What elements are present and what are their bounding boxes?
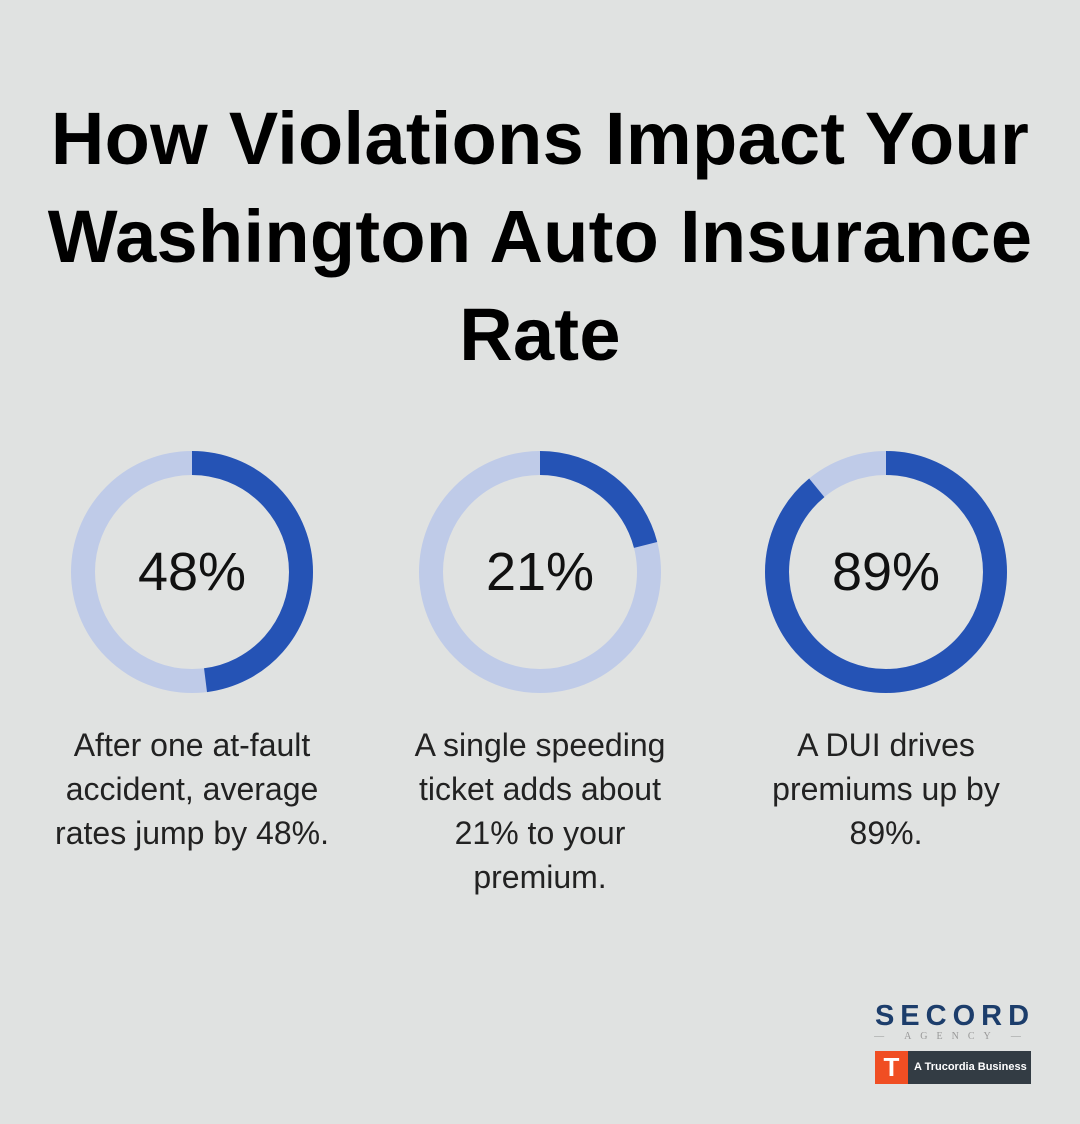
text: accident: After one at-fault accident, average rates jump by 48%. bbox=[55, 727, 329, 851]
donut: 48%: 48% bbox=[138, 542, 246, 602]
logo text: SECORD: SECORD bbox=[875, 1000, 1035, 1032]
donut: 21%: 21% bbox=[486, 542, 594, 602]
text: speeding: A single speeding ticket adds about 21% to your premium. bbox=[415, 727, 665, 895]
donut: 89% bbox=[765, 451, 1007, 693]
title: Washington Auto Insurance bbox=[48, 195, 1032, 278]
logo bbox=[874, 1000, 1035, 1084]
text: DUI: A DUI drives premiums up by 89%. bbox=[772, 727, 1000, 851]
donut: 48% bbox=[71, 451, 313, 693]
badge: Trucordia: T bbox=[884, 1052, 899, 1082]
badge: Trucordia: A Trucordia Business bbox=[914, 1061, 1027, 1073]
donut: 21% bbox=[419, 451, 661, 693]
title: Rate bbox=[459, 293, 621, 376]
donut: 89%: 89% bbox=[832, 542, 940, 602]
badge: Trucordia bbox=[875, 1051, 1031, 1084]
logo text: AGENCY: — AGENCY — bbox=[874, 1031, 1030, 1042]
title bbox=[48, 97, 1032, 376]
title: How Violations Impact Your bbox=[51, 97, 1029, 180]
